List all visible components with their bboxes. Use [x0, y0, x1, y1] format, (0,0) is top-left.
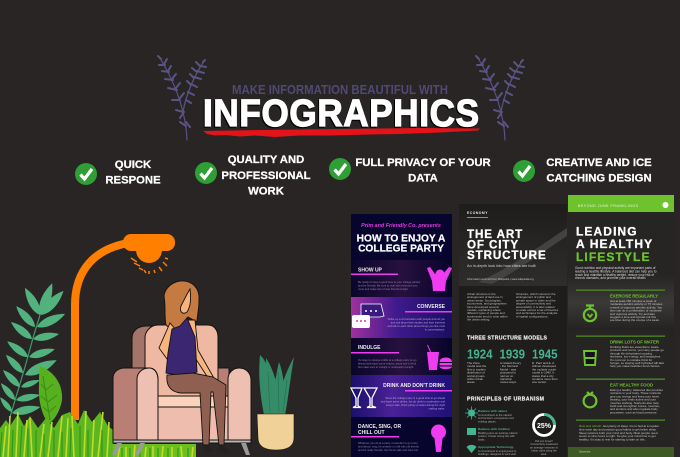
section: dance: DANCE, SING, OR	[358, 424, 401, 430]
icon: apple	[584, 392, 596, 407]
illustration: potted snake plant	[257, 355, 294, 450]
section: food: beating, your brain active and your	[610, 398, 656, 402]
chair base	[113, 440, 251, 443]
city intro text: the urban setting.	[467, 318, 490, 322]
feature text: WORK	[248, 186, 285, 198]
illustration: fern plant	[0, 282, 67, 417]
section: water: It's common to mistake thirst for	[610, 358, 652, 362]
city intro text: businesses tend to exist within	[467, 314, 508, 318]
health closing text: Rest and refresh: Get plenty of sleep. Go to bed at a regular	[579, 424, 659, 428]
panel: healthy lifestyle infographic: Sources:	[579, 450, 591, 454]
principle list: Balance with tradition	[478, 427, 510, 431]
tank top	[166, 318, 197, 376]
party heading: COLLEGE PARTY	[358, 244, 444, 254]
feature text: DATA	[408, 172, 438, 184]
city intro text: different types of people and	[467, 311, 505, 315]
section: food: give you energy and keep your heart	[610, 394, 659, 398]
section: drink: Since the college party is a great time to go ahead	[385, 396, 445, 400]
panel: art of city structure infographic: Information sourced from Wikipedia | www.wikipedia.org	[467, 277, 534, 281]
feature text: PROFESSIONAL	[221, 170, 311, 182]
model descriptions: D. Pant and E. A.	[532, 361, 555, 365]
feature: privacy	[329, 157, 491, 184]
principle list: Appropriate Technology	[478, 445, 514, 449]
years	[467, 346, 558, 362]
lamp rays	[131, 258, 168, 274]
principle list: buildings; designed to work well.	[478, 452, 517, 456]
model descriptions: model was the	[467, 364, 487, 368]
city intro text: of spatial configurations.	[516, 314, 549, 318]
section: drink: and have some drinks, but do drink in moderation and	[381, 400, 446, 404]
feature text: RESPONE	[105, 174, 161, 186]
city heading: THE ART	[467, 228, 523, 241]
section: drink: making water.	[428, 406, 445, 410]
party kicker: Prim and Friendly Co. presents	[361, 223, 441, 229]
panel: art of city structure infographic: Connectivity measured	[530, 442, 558, 446]
health intro	[575, 266, 657, 280]
illustration: lamp	[75, 234, 175, 420]
section: dance	[351, 424, 446, 452]
model descriptions: proposed to	[500, 371, 516, 375]
section: exercise: exercise during the course of a week.	[610, 318, 660, 322]
principle list: Building upon an existing cultural	[478, 431, 518, 435]
section: show up: Be ready to have a good time at your college parties	[358, 280, 421, 284]
section: water: tiredness, low energy, and headaches.	[610, 355, 661, 359]
city intro text: urban areas. Sociologists,	[467, 298, 502, 302]
chair seat	[158, 396, 228, 407]
icon: cocktail glasses	[351, 388, 377, 408]
city intro text: arrangement of public and	[516, 295, 551, 299]
model descriptions: transition	[500, 377, 513, 381]
feature text: CREATIVE AND ICE	[546, 157, 652, 169]
section: converse: CONVERSE	[417, 304, 446, 310]
principle list: existing places.	[478, 419, 497, 423]
model descriptions: social groups	[467, 374, 485, 378]
title: infographics: INFOGRAPHICS	[203, 92, 479, 134]
city heading: STRUCTURE	[467, 249, 547, 262]
model descriptions: narrow on	[500, 374, 514, 378]
panel: art of city structure infographic: an average measure of	[530, 445, 558, 449]
section: water: hunger, so staying well hydrated will also	[610, 361, 665, 365]
section: drink: keep it safe. Drink plenty of water during the night	[386, 403, 445, 407]
panel: college party infographic	[351, 214, 452, 457]
section: converse: and ask about their studies and their interests	[391, 320, 446, 324]
section: food: processes, such as blood pressure.	[610, 410, 657, 414]
icon: stopwatch	[584, 306, 596, 321]
section: food	[576, 378, 665, 414]
section: indulge: but make sure to indulge in moderation tonight.	[358, 365, 414, 369]
icon: right lavender sprig	[476, 56, 524, 140]
principle list: Balance with nature	[478, 409, 508, 413]
section: food: build and strengthen bones, muscles,	[610, 404, 660, 408]
principle list: environment, ecosystems and	[478, 416, 514, 420]
section: food: and tendons and also regulate body	[610, 407, 658, 411]
red brush underline	[203, 128, 480, 137]
icon: chat bubbles	[352, 304, 384, 328]
section: exercise: EXERCISE REGULARLY	[610, 294, 658, 298]
section: show up	[351, 267, 452, 291]
health intro: reach and maintain a healthy weight, reduce your risk of	[575, 273, 654, 277]
section: water: products and toxins, yet many people go	[610, 348, 664, 352]
model descriptions: first to explain	[467, 367, 486, 371]
section: indulge: ahead and enjoy some snacks, pizza and a drink	[358, 362, 417, 366]
model descriptions: Ullman developed	[532, 364, 556, 368]
feature text: QUALITY AND	[228, 154, 304, 166]
section: converse: and talk to each other about things you like most	[387, 324, 445, 328]
section: food: Eating a healthy, balanced diet provides	[610, 388, 663, 392]
illustration: green leaf	[39, 366, 62, 424]
city intro text	[467, 292, 559, 322]
city heading: OF CITY	[467, 238, 519, 252]
health footer	[568, 447, 674, 457]
model descriptions	[467, 361, 558, 384]
illustration: grass	[0, 410, 196, 457]
health heading: A HEALTHY	[576, 237, 653, 251]
years: 1924	[467, 346, 493, 362]
section: indulge: INDULGE	[358, 345, 381, 351]
section: exercise: and vigorous activity. Try and also	[610, 312, 655, 316]
icon: person cheering	[427, 267, 452, 291]
section: exercise: suggest a time and spread out this	[610, 315, 656, 319]
section: exercise: Get at least 150 minutes a week of	[610, 299, 656, 303]
health closing text	[579, 424, 659, 442]
model descriptions: distribution of	[467, 371, 485, 375]
principle list	[465, 406, 518, 456]
health closing text: Sleep restores both your mind and body. Most people need	[579, 431, 658, 435]
section: exercise: moderate aerobic activity or 75 minutes	[610, 302, 663, 306]
model descriptions: contains more than	[532, 377, 558, 381]
model descriptions: routes ways.	[500, 380, 517, 384]
city intro text: arrangement of land use in	[467, 295, 503, 299]
section: water	[576, 336, 665, 368]
section: converse	[352, 304, 452, 332]
section: dance: and be really friendly. Get home safe and have fun.	[358, 448, 419, 452]
section: water: Drinking fluids are essential to waste	[610, 345, 659, 349]
health intro: chronic diseases, and promote your overall health.	[575, 276, 646, 280]
city kicker: ECONOMY	[467, 211, 488, 215]
principle list: loads.	[478, 437, 485, 441]
years: 1939	[500, 346, 525, 362]
feature text: FULL PRIVACY OF YOUR	[355, 157, 491, 169]
section: dance: Whatever you do at a party, remember to go crazy	[358, 441, 418, 445]
chair legs	[112, 443, 250, 455]
model descriptions: areas.	[467, 380, 476, 384]
section: drink: DRINK AND DON'T DRINK	[383, 383, 445, 389]
hair	[164, 281, 199, 333]
section: dance: and dance, sing, be creative or chill with old friends	[358, 444, 419, 448]
feature: quality work	[195, 154, 311, 198]
section: food: EAT HEALTHY FOOD	[610, 382, 653, 388]
panel: art of city structure infographic: Did you know?	[535, 439, 553, 443]
city intro text: Urban structure is the	[467, 292, 496, 296]
icon: check	[329, 158, 351, 180]
city intro text: to scale across a set of theories	[516, 308, 559, 312]
section: exercise: a week of vigorous aerobic activity. You	[610, 305, 662, 309]
heading: principles of urbanism: PRINCIPLES OF URBANISM	[467, 396, 544, 402]
panel: art of city structure infographic	[459, 204, 567, 457]
city intro text: accessibility. It is also related	[516, 305, 555, 309]
section: exercise: also can do a combination of moderate	[610, 309, 662, 313]
principle list: system. Create strong ties with	[478, 434, 515, 438]
left arm	[113, 368, 158, 441]
panel: healthy lifestyle infographic	[568, 195, 674, 457]
health heading: LEADING	[576, 224, 638, 238]
section: converse: Strike up a conversation with people around you	[388, 317, 445, 321]
model descriptions: states that a city	[532, 374, 554, 378]
icon: check	[75, 163, 97, 185]
model descriptions: within urban	[467, 377, 484, 381]
model descriptions: The Zone	[467, 361, 480, 365]
section: show up: and be friendly. Be sure to chat with everyone you	[358, 284, 418, 288]
principle list: A commitment to the natural	[478, 413, 512, 417]
model descriptions: - the Sectoral	[500, 364, 518, 368]
model descriptions: one center.	[532, 380, 547, 384]
section: converse: in conversations.	[425, 328, 445, 332]
illustration: armchair	[112, 325, 251, 455]
city intro text: private space in cities and the	[516, 298, 556, 302]
icon: drink and burger	[427, 345, 452, 370]
health closing text: healthy, it's okay to rest for starting to take on this.	[579, 438, 646, 442]
icon: microphone	[431, 425, 446, 452]
section: water: through life dehydrated causing	[610, 351, 652, 355]
icon: check	[195, 162, 217, 184]
health heading: LIFESTYLE	[576, 250, 651, 264]
model descriptions: the multiple nuclei	[532, 367, 556, 371]
panel: art of city structure infographic: area.	[541, 452, 547, 456]
donut chart: 25%: 25%	[537, 423, 552, 430]
section: show up: SHOW UP	[358, 268, 383, 274]
health closing text: seven to nine hours a night. So give your mind time to get	[579, 434, 656, 438]
section: food: nutrients to your body. These nutrients	[610, 391, 661, 395]
city intro text: and techniques for the analysis	[516, 311, 558, 315]
city subhead: An in-depth look into how cities are built	[467, 263, 536, 268]
donut chart: 25%	[534, 414, 554, 436]
section: water: help you make healthier food choices.	[610, 364, 661, 368]
illustration: woman	[159, 281, 229, 453]
section: indulge	[351, 345, 452, 370]
city intro text: models, explaining where	[467, 308, 501, 312]
arms	[159, 323, 194, 378]
city intro text: economists, and geographers	[467, 302, 507, 306]
party heading: HOW TO ENJOY A	[357, 234, 446, 244]
legs	[167, 373, 226, 445]
health header bar	[568, 195, 674, 212]
subtitle: MAKE INFORMATION BEAUTIFUL WITH	[232, 83, 448, 97]
feature: quick response	[75, 159, 161, 186]
section: drink	[351, 383, 452, 410]
years: 1945	[532, 346, 558, 362]
city intro text: have developed several	[467, 305, 499, 309]
feet	[203, 446, 229, 453]
right arm	[228, 368, 251, 441]
panel: art of city structure infographic: urban cities using the	[531, 449, 557, 453]
feature text: CATCHING DESIGN	[546, 172, 652, 184]
health closing text: time each day and practice good habits to get better sleep.	[579, 427, 657, 431]
icon: left lavender sprig	[158, 56, 206, 140]
icon: glass of water	[584, 351, 596, 365]
panel: healthy lifestyle infographic: BEYOND JUNK FRANKLINGS	[578, 204, 639, 208]
icon: check	[513, 160, 535, 182]
section: indulge: It's okay to splurge a little at a college party so go	[358, 358, 417, 362]
principle list: A commitment to employment in	[478, 449, 517, 453]
model descriptions: Model - was	[500, 367, 517, 371]
section: dance: CHILL OUT	[358, 430, 385, 436]
health intro: leading a healthy lifestyle. A balanced diet can help you to	[575, 269, 657, 273]
feature: creative design	[513, 157, 652, 184]
model descriptions: A related theory	[500, 361, 522, 365]
city intro text: Structure, which concerns the	[516, 292, 556, 296]
city intro text: degree of connectivity and	[516, 302, 551, 306]
section: water: DRINK LOTS OF WATER	[610, 340, 660, 344]
model descriptions: model in 1945. It	[532, 371, 554, 375]
section: exercise	[576, 290, 665, 322]
health intro: Good nutrition and physical activity are important parts of	[575, 266, 656, 270]
chair back	[132, 326, 210, 370]
feature text: QUICK	[115, 159, 152, 171]
section: food: muscles working. Nutrients also help	[610, 401, 659, 405]
section: show up: meet and make lots of new friends tonight.	[358, 287, 409, 291]
face	[180, 289, 191, 313]
heading: three structure models: THREE STRUCTURE MODELS	[467, 336, 548, 342]
